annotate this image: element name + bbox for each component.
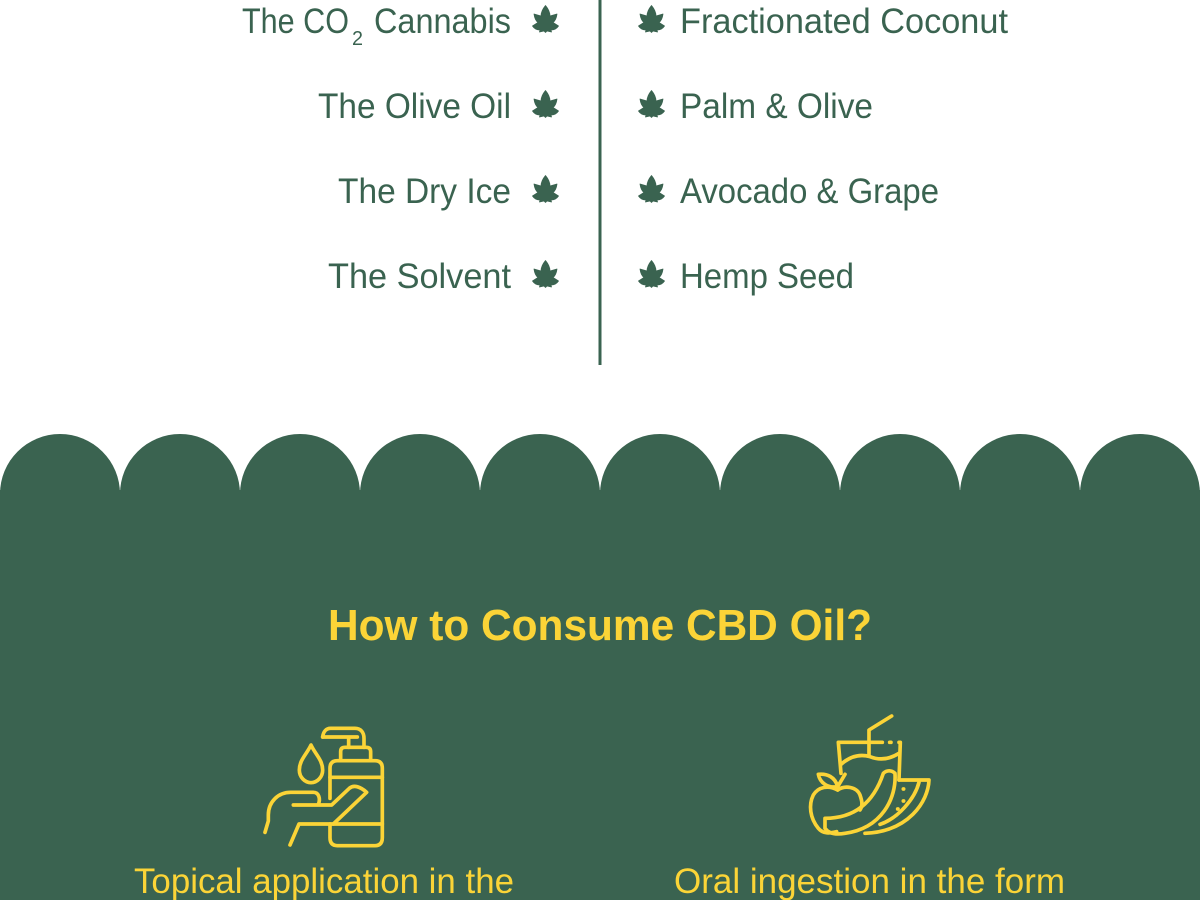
carrier: Hemp Seed: Hemp Seed [680, 257, 854, 296]
icon: leaf solvent [532, 260, 558, 288]
text: oral ingestion: Oral ingestion in the form [674, 862, 1065, 900]
icon: leaf CO2 [532, 6, 558, 32]
panel: carrier oils list [638, 2, 1008, 296]
extraction: The Dry Ice: The Dry Ice [338, 172, 511, 211]
extraction: The CO2 Cannabis [242, 2, 511, 50]
icon: drink and fruits [811, 716, 929, 834]
icon: leaf coconut [638, 6, 664, 32]
icon: leaf hemp seed [638, 260, 664, 288]
carrier: Avocado & Grape: Avocado & Grape [680, 172, 939, 211]
extraction: The CO2 Cannabis: Cannabis [374, 2, 511, 41]
heading: How to Consume CBD Oil?: How to Consume CBD Oil? [328, 601, 872, 650]
extraction: The CO2 Cannabis: The CO [242, 2, 349, 41]
icon: leaf palm [638, 90, 664, 118]
center divider line [598, 0, 602, 365]
icon: leaf olive oil [532, 90, 558, 118]
icon: pump bottle and hand [265, 728, 382, 846]
extraction: The CO2 Cannabis: 2 [352, 28, 363, 50]
extraction: The Olive Oil: The Olive Oil [318, 87, 511, 126]
icon: leaf avocado [638, 176, 664, 202]
icon: leaf dry ice [532, 176, 558, 202]
panel: extraction methods list [242, 2, 558, 296]
extraction: The Solvent: The Solvent [328, 257, 511, 296]
text: topical application: Topical application in the [134, 862, 514, 900]
panel: green scalloped background [0, 434, 1200, 900]
carrier: Fractionated Coconut: Fractionated Coconut [680, 2, 1008, 41]
carrier: Palm & Olive: Palm & Olive [680, 87, 873, 126]
